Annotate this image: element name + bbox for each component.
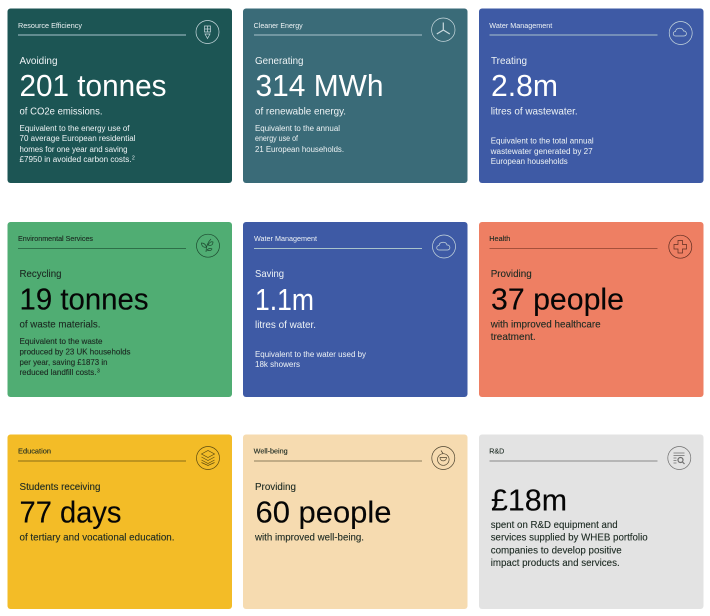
text: equivalence note: Equivalent to the waste (20, 337, 103, 346)
text: Treating: Treating (491, 55, 527, 67)
icon: apple (432, 446, 455, 470)
heading: Health: Health (489, 236, 510, 243)
icon: plant (196, 234, 220, 257)
text: equivalence note: reduced landfill costs. (20, 368, 96, 377)
text: equivalence note: produced by 23 UK households (20, 348, 130, 356)
icon: rain cloud (432, 235, 456, 258)
text: Generating: Generating (255, 55, 304, 67)
stat: 314 MWh: 314 MWh (256, 68, 384, 103)
panel: Water Management (treating) (479, 8, 704, 183)
text: Avoiding: Avoiding (20, 55, 58, 67)
text: Saving: Saving (255, 268, 284, 280)
heading: Water Management: Water Management (489, 23, 552, 30)
icon: light bulb (196, 20, 219, 44)
text: R&D spending description: impact products and services. (491, 557, 620, 569)
text: equivalence note: wastewater generated by 27 (490, 147, 593, 156)
stat: 37 people: 37 people (491, 282, 624, 317)
text: equivalence note: Equivalent to the annual (255, 124, 340, 133)
text: equivalence note: Equivalent to the energy use of (20, 124, 130, 133)
text: equivalence note: per year, saving £1873 in (20, 358, 108, 367)
text: Students receiving: Students receiving (20, 481, 101, 493)
heading: Well-being: Well-being (254, 449, 288, 456)
text: equivalence note (20, 124, 136, 164)
text: equivalence note: 2 (132, 156, 135, 162)
text: of CO2e emissions: of CO2e emissions. (20, 106, 102, 118)
text: equivalence note: £7950 in avoided carbon costs. (20, 155, 132, 164)
text: with improved well-being: with improved well-being. (254, 532, 364, 544)
stat: 19 tonnes: 19 tonnes (20, 282, 148, 317)
heading: Education: Education (18, 449, 51, 456)
text: R&D spending description: companies to develop positive (491, 544, 622, 556)
text: with improved healthcare treatment: treatment. (491, 331, 536, 343)
icon: magnifier over document (668, 446, 691, 470)
stat: 2.8m: 2.8m (491, 68, 558, 103)
panel: Well-being (243, 434, 468, 609)
stat: £18m: £18m (491, 483, 567, 518)
heading: Environmental Services: Environmental Services (18, 236, 94, 243)
heading: Water Management: Water Management (254, 236, 317, 243)
stat: 201 tonnes: 201 tonnes (20, 68, 166, 103)
text: equivalence note (20, 337, 130, 377)
stat: 60 people: 60 people (256, 494, 392, 529)
text: of renewable energy: of renewable energy. (255, 106, 346, 118)
stat: 1.1m: 1.1m (255, 282, 314, 317)
text: with improved healthcare treatment (490, 319, 601, 343)
text: equivalence note: 21 European households. (255, 145, 344, 154)
text: R&D spending description: spent on R&D equipment and (491, 519, 618, 531)
icon: wind turbine (432, 18, 455, 41)
heading: Resource Efficiency: Resource Efficiency (18, 23, 83, 30)
text: equivalence note (490, 136, 594, 166)
icon: rain cloud (669, 22, 692, 44)
text: equivalence note: 18k showers (255, 360, 300, 369)
text: with improved healthcare treatment: with improved healthcare (490, 319, 601, 331)
panel: Resource Efficiency (8, 8, 232, 183)
text: R&D spending description (491, 519, 648, 569)
panel: Environmental Services (8, 222, 232, 397)
text: equivalence note (255, 124, 344, 154)
stat: 77 days: 77 days (20, 494, 122, 529)
icon: medical cross (669, 235, 692, 258)
text: of waste materials: of waste materials. (20, 319, 100, 331)
text: R&D spending description: services supplied by WHEB portfolio (491, 532, 648, 544)
text: litres of wastewater: litres of wastewater. (491, 106, 578, 118)
heading: R&D: R&D (489, 449, 504, 456)
text: equivalence note (255, 350, 366, 369)
text: Recycling: Recycling (20, 268, 62, 280)
text: equivalence note: Equivalent to the water used by (255, 350, 366, 359)
text: equivalence note: European households (491, 157, 568, 166)
panel: Education (8, 434, 232, 609)
text: Providing: Providing (255, 481, 296, 493)
text: litres of water: litres of water. (255, 319, 316, 331)
text: equivalence note: energy use of (255, 134, 299, 143)
heading: Cleaner Energy: Cleaner Energy (254, 23, 303, 30)
icon: stacked books (196, 446, 220, 470)
text: equivalence note: Equivalent to the total annual (491, 136, 594, 146)
panel: Cleaner Energy (243, 8, 468, 183)
text: equivalence note: 70 average European residential (20, 134, 136, 143)
panel: Health (479, 222, 704, 397)
text: equivalence note: 3 (97, 368, 100, 374)
text: equivalence note: homes for one year and saving (20, 145, 128, 154)
text: Providing: Providing (491, 268, 532, 280)
panel: Water Management (saving) (243, 222, 468, 397)
panel: R&D (479, 434, 704, 609)
text: of tertiary and vocational education: of tertiary and vocational education. (20, 532, 174, 544)
